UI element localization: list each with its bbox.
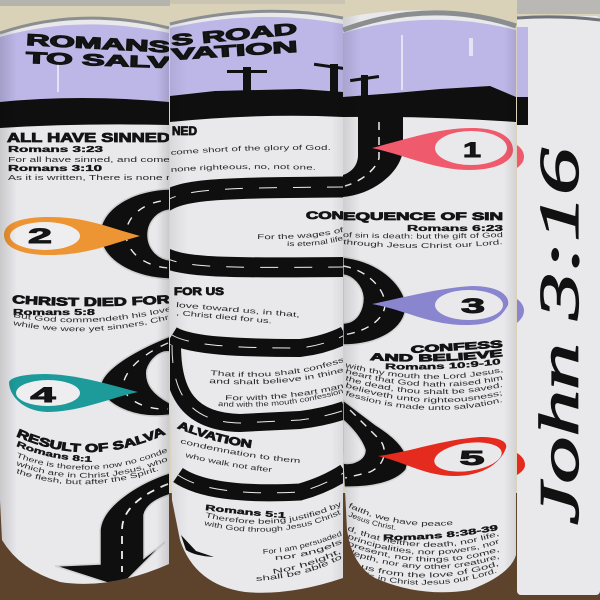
text: confess left half: and shalt believe in thine bbox=[210, 368, 343, 384]
text: all have sinned: Romans 3:10 bbox=[8, 164, 103, 173]
road loop mid bbox=[343, 257, 406, 345]
text: confess and believe: the dead, thou shalt be saved. bbox=[346, 376, 502, 394]
pin tips bbox=[517, 145, 525, 475]
cross bbox=[350, 75, 380, 96]
text: peace and romans 8: e us from the love of God, bbox=[349, 560, 500, 580]
lid right bbox=[517, 17, 600, 20]
road to the top bbox=[343, 115, 403, 197]
text: peace and romans 8 bbox=[348, 503, 499, 585]
text: salvation right half: ALVATION bbox=[176, 422, 252, 448]
title right half bbox=[170, 24, 297, 60]
road arrow tip fragment bbox=[181, 535, 214, 557]
road loop low bbox=[343, 400, 408, 487]
text: peace and romans 8: principalities, nor powers, nor bbox=[348, 534, 498, 556]
text: sinned right half: none righteous, no, not one. bbox=[171, 164, 315, 172]
text: peace and romans 8: Romans 8:38-39 bbox=[384, 525, 498, 540]
text: confess and believe bbox=[346, 340, 503, 410]
panel: tumbler centre-right, pins 1 3 5 bbox=[343, 10, 516, 592]
text: christ died for us: But God commendeth his love bbox=[14, 308, 169, 322]
black hill band bbox=[170, 89, 343, 122]
text: result of salvation: which are in Christ Jesus, who bbox=[17, 458, 168, 478]
text: result of salvation: the flesh, but after the Spirit. bbox=[17, 468, 158, 484]
text: consequence left half bbox=[258, 211, 343, 246]
text: confess left half bbox=[210, 358, 343, 407]
title left half: TO SALV bbox=[26, 50, 171, 72]
road loop lower bbox=[100, 336, 170, 416]
title right half: S ROAD bbox=[171, 21, 298, 50]
title left half bbox=[26, 34, 169, 68]
pin 2 bbox=[4, 217, 140, 255]
text: confess left half: That if thou shalt confess bbox=[210, 358, 343, 377]
text: peace and romans 8: ch is in Christ Jesus our Lord. bbox=[351, 567, 498, 587]
script text rotated: John 3:16 bbox=[529, 148, 591, 525]
text: confess and believe: CONFESS bbox=[410, 339, 504, 356]
road with end arrow bbox=[55, 472, 172, 587]
text: confess and believe: fession is made unto salvation. bbox=[346, 390, 502, 410]
text: romans 5:1: Therefore being justified by bbox=[206, 502, 340, 524]
lavender sky bbox=[0, 24, 169, 102]
text: all have sinned: As it is written, There is none r bbox=[8, 175, 171, 182]
text: sinned right half: NED bbox=[172, 126, 197, 138]
text: all have sinned: Romans 3:23 bbox=[8, 145, 104, 154]
pin 2: 2 bbox=[28, 225, 52, 248]
black hill band bbox=[0, 98, 169, 128]
pin 1 bbox=[372, 128, 513, 170]
text: result of salvation: Romans 8:1 bbox=[16, 440, 92, 462]
text: confess and believe: AND BELIEVE bbox=[369, 348, 503, 362]
text: romans 5:1: For I am persuaded bbox=[263, 530, 342, 554]
text: for us: FOR US bbox=[174, 286, 224, 298]
text: salvation right half bbox=[176, 422, 300, 472]
road: winding lanes bbox=[160, 187, 345, 493]
reflection highlights bbox=[402, 35, 471, 90]
text: result of salvation: RESULT OF SALVA bbox=[16, 428, 166, 452]
panel: tumbler right, John 3:16 bbox=[517, 0, 600, 600]
text: confess and believe: believeth unto righteousness; bbox=[346, 382, 502, 404]
text: for us: , Christ died for us. bbox=[176, 310, 272, 325]
text: romans 5:1 bbox=[204, 502, 342, 581]
text: sinned right half bbox=[171, 126, 330, 172]
text: all have sinned: For all have sinned, and come bbox=[8, 157, 170, 164]
text: all have sinned: ALL HAVE SINNED bbox=[7, 131, 170, 145]
text: romans 5:1: shall be able to bbox=[256, 556, 342, 581]
text: peace and romans 8: present, nor things to come, bbox=[346, 540, 500, 564]
shading bbox=[0, 25, 169, 568]
pin 3 bbox=[372, 286, 508, 325]
lavender edge strip bbox=[517, 27, 528, 98]
lid left bbox=[0, 18, 169, 33]
text: consequence of sin bbox=[343, 212, 503, 248]
pin 4 bbox=[9, 374, 138, 412]
road loop upper bbox=[101, 188, 169, 280]
text: consequence left half: is eternal life bbox=[288, 236, 342, 246]
lid centre-right bbox=[343, 13, 516, 30]
text: christ died for us: CHRIST DIED FOR bbox=[12, 295, 169, 306]
text: salvation right half: condemnation to them bbox=[180, 440, 300, 463]
reflection highlight bbox=[57, 62, 59, 92]
pin 5 bbox=[378, 437, 506, 476]
text: confess left half: For with the heart man bbox=[226, 384, 343, 400]
text: christ died for us: while we were yet sinners, Chri bbox=[14, 316, 168, 332]
text: consequence of sin: Romans 6:23 bbox=[407, 224, 504, 233]
text: consequence of sin: through Jesus Christ our Lord. bbox=[344, 239, 502, 248]
lid centre-left bbox=[170, 11, 343, 24]
text: for us: love toward us, in that, bbox=[176, 302, 300, 319]
pin 1: 1 bbox=[463, 139, 481, 162]
text: for us bbox=[174, 286, 300, 325]
text: result of salvation: There is therefore now no conde bbox=[18, 449, 167, 470]
text: christ died for us bbox=[12, 295, 169, 332]
text: peace and romans 8: faith, we have peace bbox=[349, 503, 452, 528]
pin 5: 5 bbox=[460, 448, 484, 470]
text: sinned right half: come short of the glory of God. bbox=[171, 144, 330, 155]
text: consequence of sin: of sin is death: but the gift of God bbox=[343, 232, 502, 240]
text: romans 5:1: nor angels bbox=[276, 540, 342, 560]
lavender sky bbox=[343, 20, 516, 100]
title left half: ROMANS bbox=[26, 32, 171, 57]
text: confess and believe: heart that God hath raised him bbox=[346, 368, 502, 387]
text: romans 5:1: Nor height, bbox=[273, 551, 340, 574]
title right half: VATION bbox=[171, 39, 298, 64]
text: confess and believe: Romans 10:9-10 bbox=[386, 358, 500, 370]
text: peace and romans 8: Jesus Christ. bbox=[348, 512, 396, 530]
text: consequence of sin: EQUENCE OF SIN bbox=[343, 211, 503, 223]
text: peace and romans 8: depth, nor any other creature, bbox=[346, 548, 501, 571]
pin 3: 3 bbox=[461, 295, 485, 318]
panel: tumbler left, all have sinned bbox=[0, 20, 169, 584]
text: consequence left half: CON bbox=[306, 210, 344, 222]
lavender sky bbox=[170, 17, 343, 96]
text: consequence left half: For the wages of bbox=[258, 227, 343, 240]
text: result of salvation bbox=[16, 428, 168, 484]
pin 4: 4 bbox=[30, 384, 56, 407]
text: confess left half: and with the mouth confession bbox=[218, 390, 343, 407]
panel: tumbler centre-left, road bbox=[170, 12, 343, 593]
black hill band bbox=[343, 86, 516, 122]
crosses bbox=[227, 62, 343, 92]
text: all have sinned bbox=[7, 131, 171, 182]
text: peace and romans 8: d, that neither death, nor life, bbox=[348, 527, 498, 547]
text: confess and believe: with thy mouth the Lord Jesus, bbox=[346, 363, 502, 379]
black edge strip bbox=[517, 97, 528, 125]
text: romans 5:1: Romans 5:1 bbox=[206, 504, 286, 518]
text: salvation right half: who walk not after bbox=[186, 453, 272, 472]
text: christ died for us: Romans 5:8 bbox=[13, 308, 96, 317]
text: romans 5:1: with God through Jesus Christ bbox=[204, 510, 341, 533]
